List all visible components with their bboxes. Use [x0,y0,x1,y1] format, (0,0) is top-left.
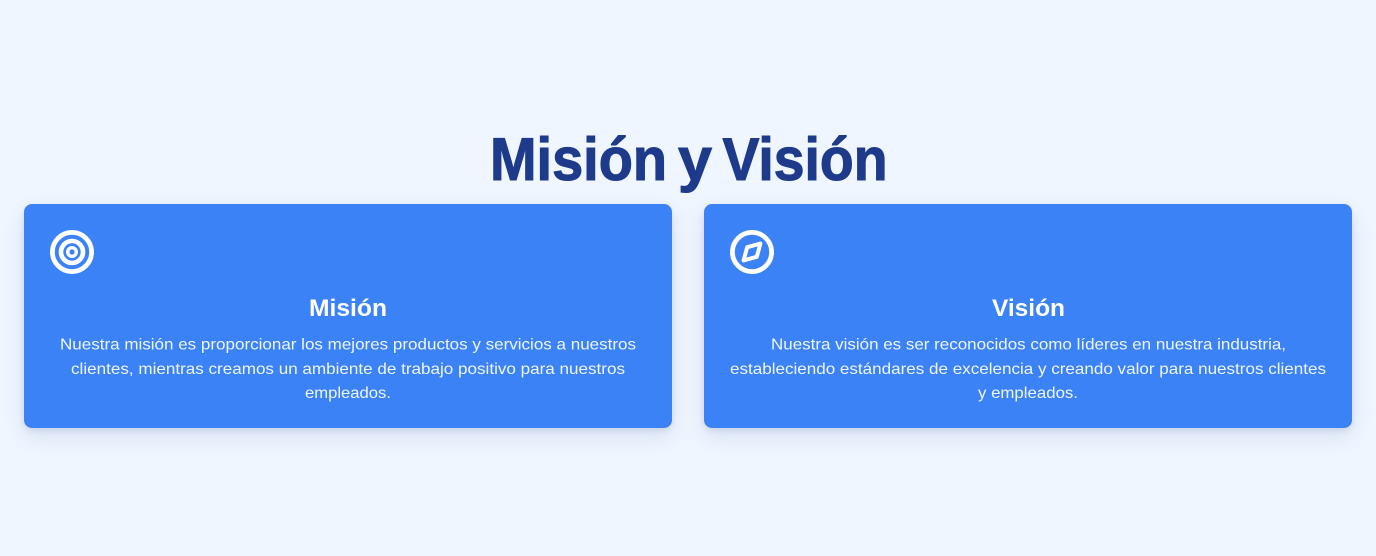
title [490,126,888,193]
title: Visión [722,126,888,193]
text block: visión description: estableciendo estándares de excelencia y creando valor para nuestros clientes [730,361,1326,378]
text block: visión description: y empleados. [978,385,1078,402]
title: Misión [490,126,667,193]
title: y [678,126,713,193]
text block: visión description: Nuestra visión es ser reconocidos como líderes en nuestra industria, [771,336,1286,354]
heading: misión: Misión [309,295,387,322]
panel: misión [24,204,672,428]
text block: visión description [730,336,1326,402]
text block: misión description: empleados. [305,385,391,402]
text block: misión description [60,336,636,402]
panel: visión [704,204,1352,428]
icon: target [50,230,94,274]
text block: misión description: Nuestra misión es proporcionar los mejores productos y servicios a nuestros [60,336,636,354]
heading: visión: Visión [992,295,1065,322]
icon: compass [730,230,774,274]
text block: misión description: clientes, mientras creamos un ambiente de trabajo positivo para nuestros [71,361,625,378]
